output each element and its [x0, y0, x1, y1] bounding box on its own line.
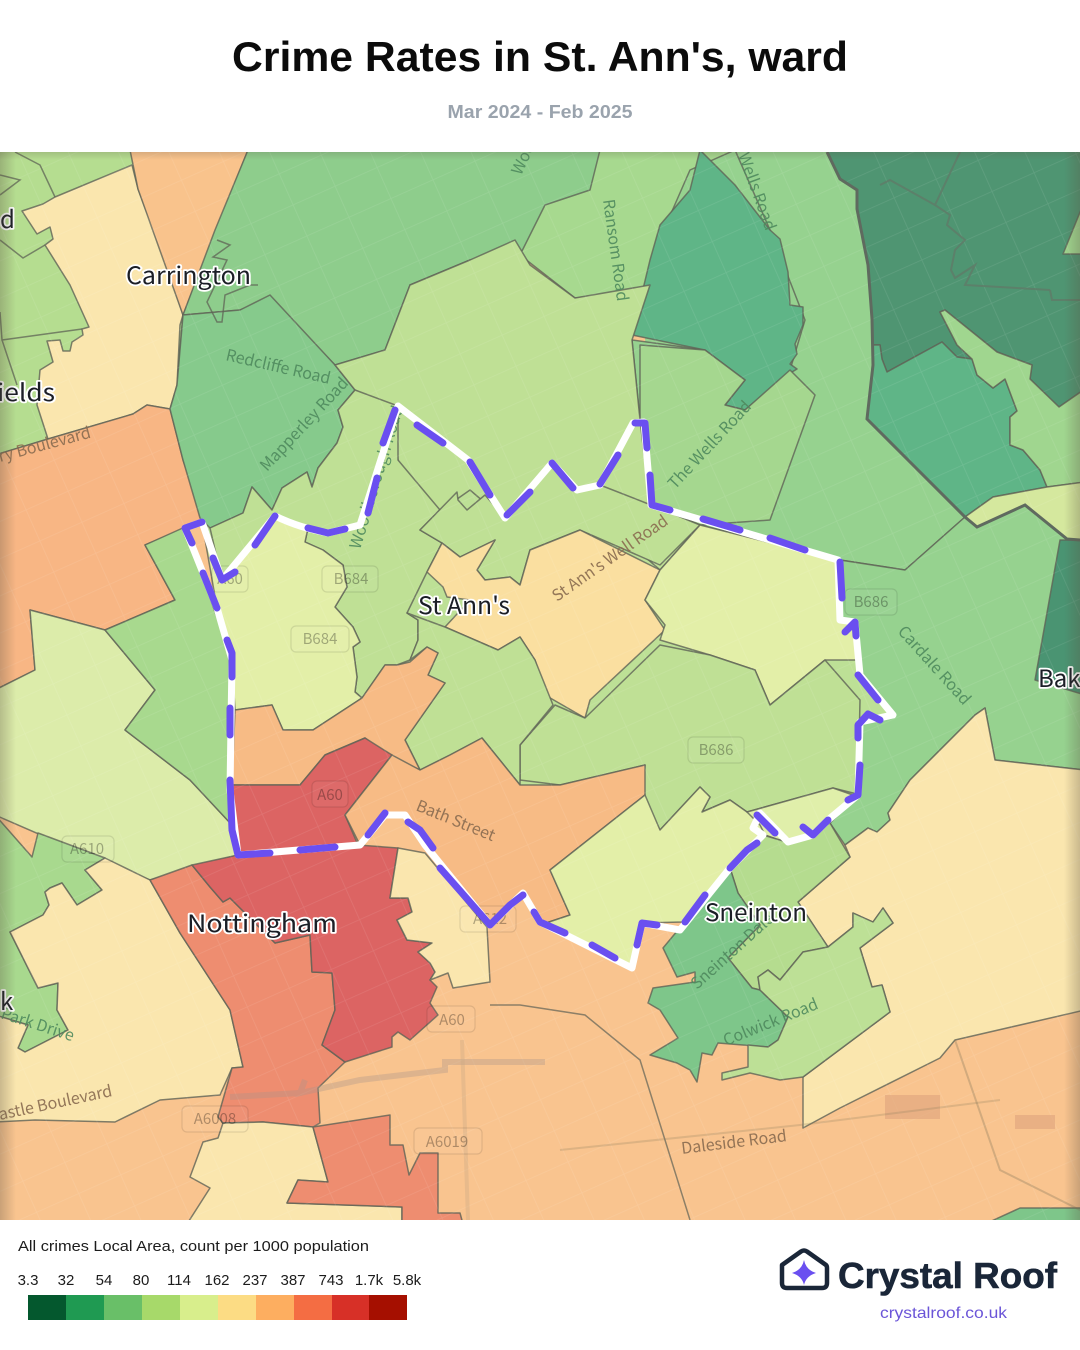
- logo: Crystal Roof: [782, 1250, 1058, 1322]
- website url: crystalroof.co.uk: [880, 1305, 1008, 1322]
- road labels: Mapperley Road: [253, 371, 353, 475]
- road labels: [0, 129, 978, 1159]
- subtitle: date range: Mar 2024 - Feb 2025: [448, 102, 632, 122]
- place names: Bak: [1038, 659, 1080, 694]
- road labels: Colwick Road: [719, 991, 821, 1051]
- road labels: Park Drive: [0, 1000, 78, 1046]
- road shields: A612: [473, 908, 507, 929]
- road labels: Sneinton Dale: [684, 906, 778, 994]
- ward outline: purple dashes: [185, 410, 880, 958]
- road labels: Wood: [504, 129, 544, 178]
- legend: [18, 1272, 422, 1320]
- legend: 387: [280, 1272, 306, 1289]
- road shields: A6019: [426, 1131, 468, 1152]
- legend: 54: [96, 1272, 112, 1289]
- legend: 5.8k: [393, 1272, 422, 1289]
- place names: Nottingham: [187, 904, 337, 939]
- place names: d: [0, 200, 15, 235]
- legend: 80: [133, 1272, 149, 1289]
- legend: 237: [242, 1272, 268, 1289]
- road shields: A610: [70, 838, 104, 859]
- road shields: A60: [439, 1009, 465, 1030]
- place names: [0, 200, 1080, 1017]
- place names: Sneinton: [705, 893, 807, 928]
- road shields: B684: [303, 628, 337, 649]
- white footer panel: [0, 1220, 1080, 1350]
- legend title: All crimes Local Area, count per 1000 population: [18, 1238, 369, 1255]
- legend: 114: [167, 1272, 191, 1289]
- ward boundary: St. Ann's: [185, 406, 893, 968]
- place names: k: [0, 982, 13, 1017]
- road labels: Ransom Road: [598, 197, 636, 303]
- place names: St Ann's: [418, 586, 510, 621]
- title: Crime Rates in St. Ann's, ward: [232, 33, 848, 80]
- road labels: The Wells Road: [661, 394, 756, 493]
- place names: Carrington: [126, 256, 251, 291]
- legend: 32: [58, 1272, 74, 1289]
- map edge vignette: [0, 152, 1080, 1220]
- legend: 743: [318, 1272, 344, 1289]
- road shields: [62, 566, 897, 1154]
- road labels: Wells Road: [733, 149, 784, 233]
- road shields: B684: [334, 568, 368, 589]
- road shields: B686: [854, 591, 888, 612]
- road shields: B686: [699, 739, 733, 760]
- road labels: Redcliffe Road: [224, 341, 333, 389]
- road shields: A60: [217, 568, 243, 589]
- road shields: A60: [317, 784, 343, 805]
- road network and rail: [0, 152, 1080, 1220]
- map regions: [0, 150, 1080, 1224]
- wordmark: Crystal Roof: [838, 1255, 1058, 1296]
- legend: 1.7k: [355, 1272, 384, 1289]
- road labels: Daleside Road: [680, 1122, 788, 1159]
- road labels: Bath Street: [413, 792, 499, 846]
- road shields: A6008: [194, 1108, 236, 1129]
- legend: 3.3: [18, 1272, 38, 1289]
- road labels: Woodborough Road: [342, 402, 408, 551]
- road labels: Cardale Road: [893, 619, 978, 709]
- legend: 162: [204, 1272, 230, 1289]
- icon: house with star: [782, 1250, 827, 1288]
- ward outline: white: [185, 406, 893, 968]
- road labels: St Ann's Well Road: [546, 508, 672, 606]
